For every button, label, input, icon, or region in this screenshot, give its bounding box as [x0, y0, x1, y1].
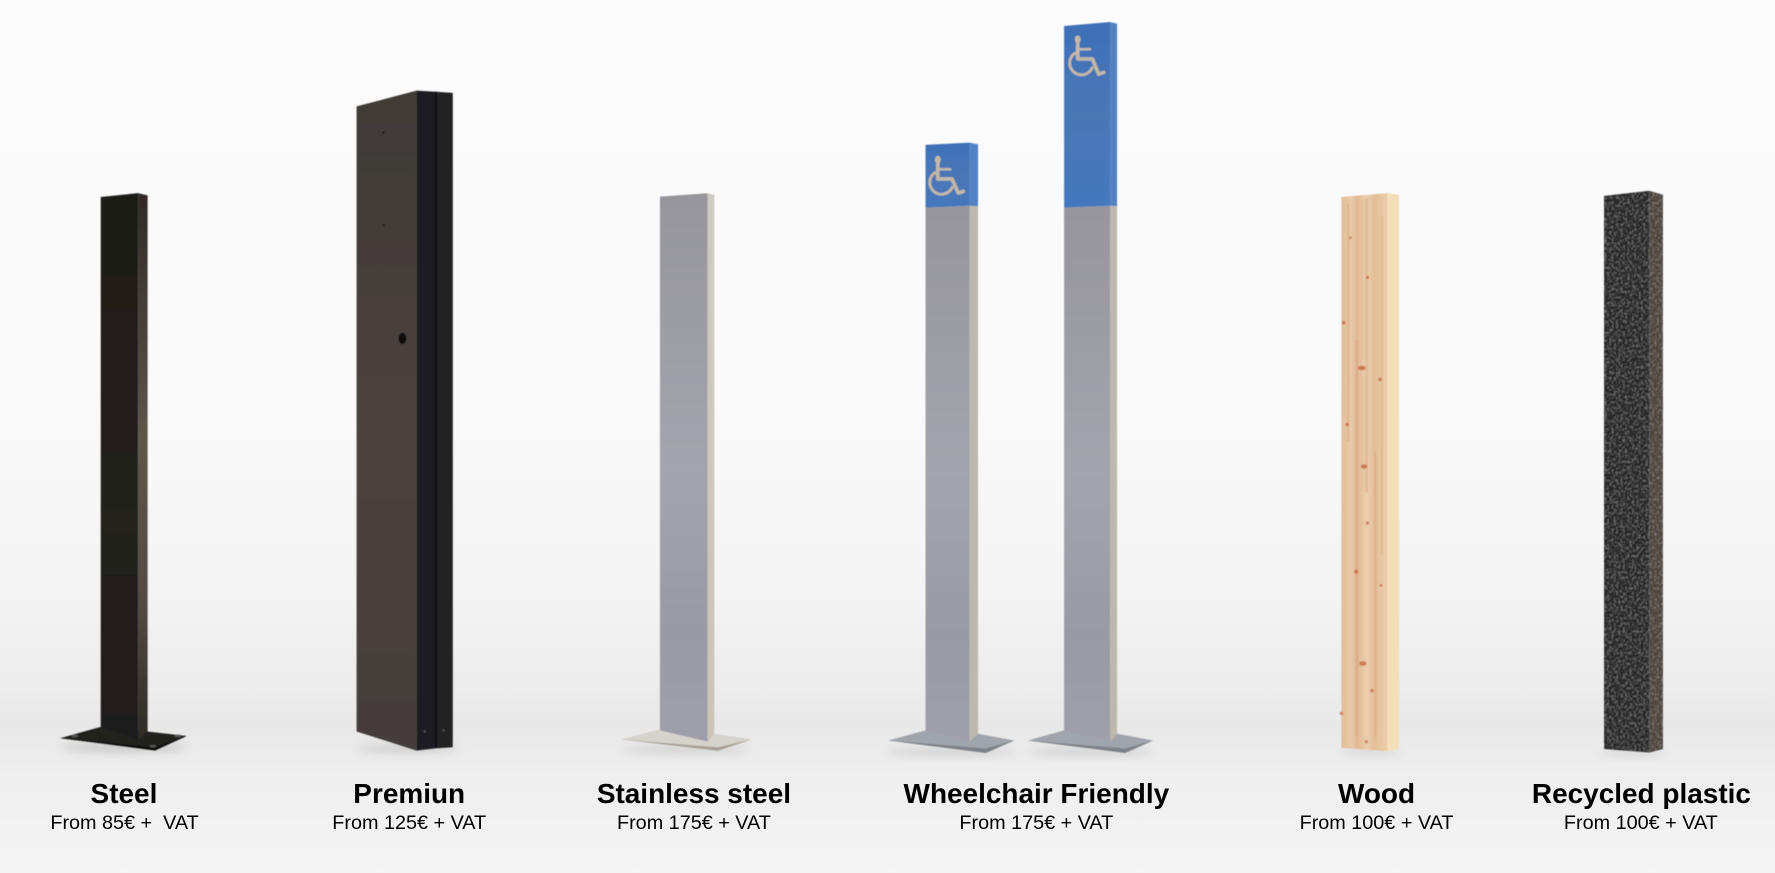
panel: stainless steel post — [597, 193, 791, 834]
price: steel: From 85€ + VAT — [50, 812, 199, 834]
heading: Wood: Wood — [1338, 778, 1415, 809]
price: stainless steel: From 175€ + VAT — [617, 812, 771, 834]
panel: wood post — [1300, 193, 1453, 834]
price: wood: From 100€ + VAT — [1300, 812, 1453, 834]
heading: Recycled plastic: Recycled plastic — [1532, 778, 1751, 809]
price: wheelchair friendly: From 175€ + VAT — [959, 812, 1113, 834]
product: steel post with base plate — [60, 193, 188, 752]
product: wood post — [1340, 193, 1400, 754]
icon: wheelchair symbol — [930, 156, 963, 194]
icon: wheelchair symbol — [1070, 36, 1104, 75]
heading: Steel: Steel — [91, 778, 157, 809]
product: recycled plastic post — [1602, 191, 1665, 755]
panel: wheelchair friendly posts — [888, 22, 1170, 834]
mounting hole: cable opening — [399, 333, 406, 344]
panel: premium post — [332, 91, 486, 834]
price: recycled plastic: From 100€ + VAT — [1564, 812, 1718, 834]
product: stainless steel post with base plate — [621, 193, 752, 753]
heading: Wheelchair Friendly: Wheelchair Friendly — [904, 778, 1170, 809]
price: premium: From 125€ + VAT — [332, 812, 486, 834]
product: short wheelchair post — [888, 143, 1014, 755]
heading: Stainless steel: Stainless steel — [597, 778, 791, 809]
product: tall wheelchair post — [1028, 22, 1154, 755]
panel: steel post — [50, 193, 199, 834]
heading: Premiun: Premiun — [353, 778, 465, 809]
panel: recycled plastic post — [1532, 191, 1751, 834]
product: premium post — [357, 91, 457, 752]
